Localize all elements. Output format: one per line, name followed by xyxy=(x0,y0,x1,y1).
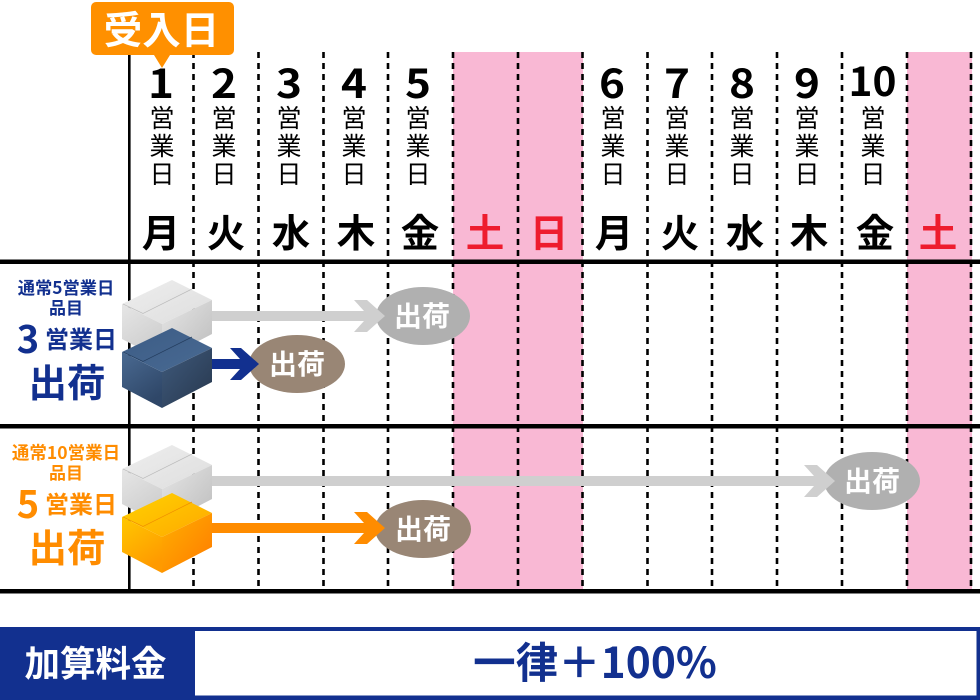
day 1: 1 xyxy=(148,52,174,110)
row label: 5 business days: 5 xyxy=(17,474,39,529)
icon: navy box xyxy=(122,328,212,408)
shipping badge: day 10 standard xyxy=(824,452,920,510)
row label: 3 business days: 通常5営業日 xyxy=(18,274,114,299)
day 1: 営 xyxy=(149,99,175,135)
day 1: 日 xyxy=(149,155,175,191)
day 5: 業 xyxy=(405,127,431,163)
shipping badge: day 2 express xyxy=(249,335,345,393)
day 8: 業 xyxy=(729,127,755,163)
shipping badge: day 2 express: 出荷 xyxy=(269,343,325,383)
surcharge label: 加算料金 xyxy=(24,636,167,687)
day headers xyxy=(142,50,957,259)
row label: 5 business days: 通常10営業日 xyxy=(12,440,120,465)
row label: 5 business days xyxy=(12,440,120,574)
day 9: 業 xyxy=(794,127,820,163)
row label: 5 business days: 営業日 xyxy=(45,485,117,520)
day 3 xyxy=(272,52,310,259)
day 3: 3 xyxy=(276,52,302,110)
day 2: 日 xyxy=(211,155,237,191)
icon: orange box xyxy=(122,493,212,573)
icon: grey box row 1 xyxy=(122,280,212,360)
day 7: 火 xyxy=(661,203,699,259)
surcharge band xyxy=(0,627,980,700)
day 6: 月 xyxy=(595,203,633,259)
day 4: 業 xyxy=(341,127,367,163)
shipping badge: day 5 standard xyxy=(376,287,470,345)
day 8 xyxy=(726,52,764,259)
day 10: 金 xyxy=(856,203,894,259)
day 7: 7 xyxy=(664,52,690,110)
callout: receipt date: 受入日 xyxy=(104,0,219,56)
day 6 xyxy=(595,52,633,259)
day 6: 業 xyxy=(600,127,626,163)
shipping badge: day 5 standard: 出荷 xyxy=(394,295,450,335)
day 3: 水 xyxy=(272,203,310,259)
row label: 3 business days: 出荷 xyxy=(28,353,106,409)
day 9: 日 xyxy=(794,155,820,191)
row label: 5 business days: 出荷 xyxy=(28,518,106,574)
callout: receipt date xyxy=(91,0,234,68)
row label: 5 business days: 品目 xyxy=(49,459,83,484)
day 5: 金 xyxy=(401,203,439,259)
day 2: 2 xyxy=(211,52,237,110)
shipping badge: day 5 express xyxy=(375,500,471,558)
day 1 xyxy=(142,52,180,259)
day 9: 営 xyxy=(794,99,820,135)
day 2: 業 xyxy=(211,127,237,163)
arrow: standard 10-day shipping xyxy=(212,465,835,497)
day 4 xyxy=(337,52,375,259)
day 5: 5 xyxy=(405,52,431,110)
day 4: 4 xyxy=(341,52,367,110)
row label: 3 business days: 3 xyxy=(17,309,39,364)
shipping badge: day 5 express: 出荷 xyxy=(395,508,451,548)
day 9: 9 xyxy=(794,52,820,110)
day 8: 8 xyxy=(729,52,755,110)
day 10: 10 xyxy=(848,50,896,108)
saturday 2: 土 xyxy=(919,203,957,259)
day 4: 日 xyxy=(341,155,367,191)
day 7: 業 xyxy=(664,127,690,163)
day 2 xyxy=(207,52,245,259)
surcharge value: 一律＋100% xyxy=(473,630,717,691)
day 1: 業 xyxy=(149,127,175,163)
day 6: 6 xyxy=(599,52,625,110)
day 6: 日 xyxy=(600,155,626,191)
day 10: 日 xyxy=(860,155,886,191)
sunday: 日 xyxy=(530,203,568,259)
day 2: 火 xyxy=(207,203,245,259)
day 8: 日 xyxy=(729,155,755,191)
day 7: 日 xyxy=(664,155,690,191)
day 5 xyxy=(401,52,439,259)
day 9 xyxy=(790,52,828,259)
day 4: 営 xyxy=(341,99,367,135)
day 10: 営 xyxy=(860,99,886,135)
row label: 3 business days: 営業日 xyxy=(45,320,117,355)
day 10 xyxy=(848,50,896,259)
day 9: 木 xyxy=(790,203,828,259)
row label: 3 business days: 品目 xyxy=(49,294,83,319)
day 6: 営 xyxy=(600,99,626,135)
arrow: express 5-day shipping xyxy=(212,512,385,544)
day 4: 木 xyxy=(337,203,375,259)
day 5: 営 xyxy=(405,99,431,135)
day 7: 営 xyxy=(664,99,690,135)
grid lines xyxy=(0,52,980,594)
arrow: standard 5-day shipping xyxy=(212,300,385,332)
day 3: 業 xyxy=(276,127,302,163)
day 1: 月 xyxy=(142,203,180,259)
day 5: 日 xyxy=(405,155,431,191)
icon: grey box row 2 xyxy=(122,445,212,525)
day 3: 営 xyxy=(276,99,302,135)
saturday: 土 xyxy=(466,203,504,259)
day 7 xyxy=(661,52,699,259)
day 8: 営 xyxy=(729,99,755,135)
day 8: 水 xyxy=(726,203,764,259)
day 10: 業 xyxy=(860,127,886,163)
shipping badge: day 10 standard: 出荷 xyxy=(844,460,900,500)
arrow: express 3-day shipping xyxy=(212,348,259,380)
day 3: 日 xyxy=(276,155,302,191)
day 2: 営 xyxy=(211,99,237,135)
row label: 3 business days xyxy=(17,274,117,409)
weekend shading xyxy=(453,52,972,590)
